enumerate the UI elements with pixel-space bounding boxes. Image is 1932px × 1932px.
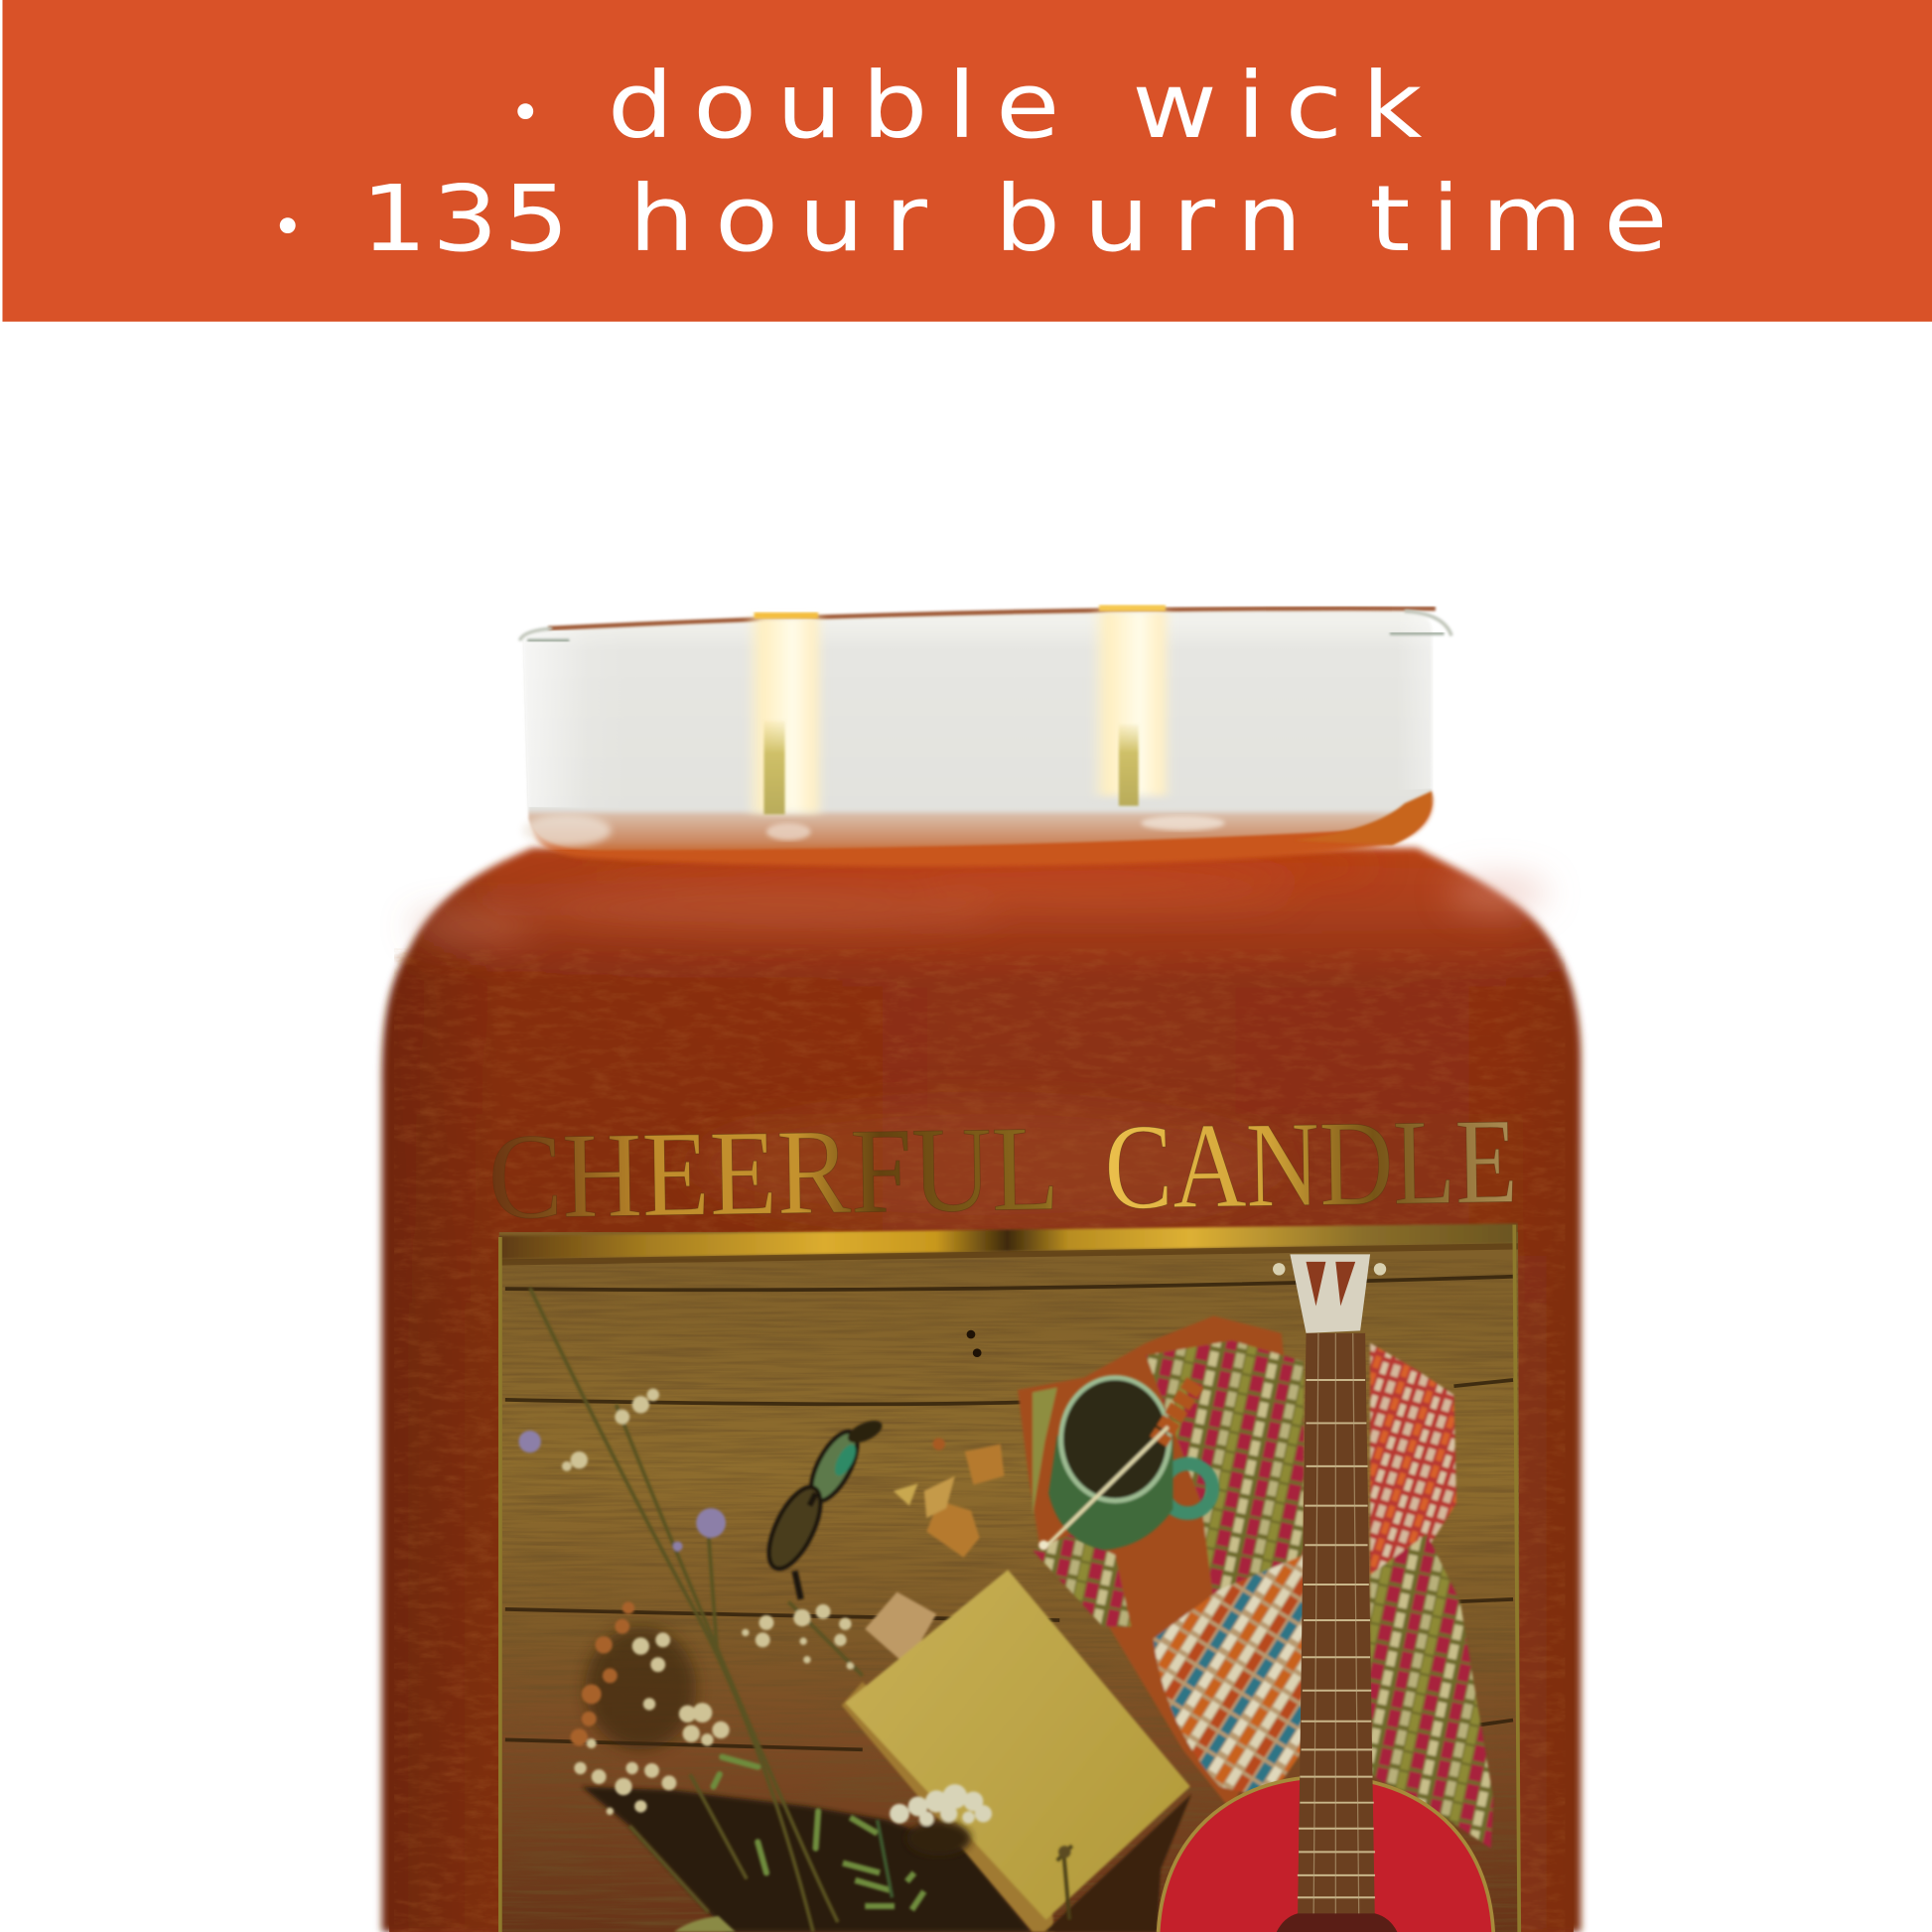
- jar body base: [389, 1601, 1574, 1932]
- brand wordmark: CHEERFUL: [487, 1101, 1060, 1245]
- brand wordmark: [487, 1093, 1518, 1245]
- shadow behind seed heads: [586, 1626, 696, 1749]
- shoulder highlights: [413, 857, 1547, 1226]
- notebook: [842, 1570, 1190, 1932]
- yarrow blossom: [890, 1784, 992, 1856]
- feature line: burn time: time: [1369, 167, 1689, 272]
- orange seed heads: [571, 1601, 634, 1746]
- feature line: burn time: 135: [361, 167, 613, 272]
- gold band: [497, 1223, 1518, 1266]
- knitted blanket: [1018, 1315, 1493, 1849]
- guitar body edge: [1159, 1777, 1493, 1932]
- green leaves: [714, 1757, 818, 1872]
- lower left glass reflection: [522, 814, 612, 847]
- glass collar: [520, 609, 1451, 850]
- guitar: [1159, 1254, 1493, 1932]
- rim edge: [520, 612, 1451, 640]
- pale flower clusters: [562, 1389, 854, 1815]
- wax mottling: [394, 949, 1565, 1932]
- dried flowers and stems: [518, 1288, 1072, 1932]
- guitar headstock: [1290, 1254, 1370, 1333]
- header banner: [2, 0, 1932, 322]
- flame left: [745, 613, 826, 814]
- far rim line: [548, 609, 1436, 628]
- feature line: burn time: •: [272, 196, 304, 259]
- dark wedge between book and guitar: [1044, 1794, 1191, 1932]
- wood background: [492, 1232, 1528, 1932]
- dark floral shadow: [582, 1787, 1033, 1932]
- knots: [967, 1330, 975, 1338]
- purple blossoms: [518, 1431, 726, 1552]
- jar body wax: [382, 848, 1581, 1932]
- reading glasses: [759, 1416, 886, 1599]
- wax pool under glass: [532, 794, 1433, 867]
- feature line: burn time: burn: [995, 167, 1381, 272]
- product label: [492, 1223, 1528, 1932]
- feature line: burn time: [272, 167, 1689, 272]
- feature line: double wick: double wick: [608, 54, 1422, 159]
- guitar neck: [1298, 1333, 1375, 1932]
- brand wordmark: CANDLE: [1104, 1093, 1518, 1235]
- feature line: double wick: •: [509, 80, 541, 144]
- lower highlights: [1141, 816, 1225, 830]
- sound hole: [1277, 1913, 1397, 1932]
- green mug: [1038, 1378, 1212, 1550]
- flame right: [1089, 605, 1173, 806]
- crackers: [894, 1438, 1004, 1558]
- guitar strings: [1313, 1333, 1359, 1932]
- fern leaves: [843, 1818, 924, 1910]
- wax rising at right of glass: [1294, 791, 1433, 845]
- candle jar: [382, 605, 1581, 1932]
- small plant stem on book: [1057, 1846, 1072, 1920]
- plank seams: [505, 1277, 1513, 1749]
- pale green leaf at bottom: [674, 1916, 736, 1932]
- guitar body: [1159, 1777, 1493, 1932]
- label gold frame: [500, 1225, 1519, 1932]
- feature line: burn time: hour: [628, 167, 1001, 272]
